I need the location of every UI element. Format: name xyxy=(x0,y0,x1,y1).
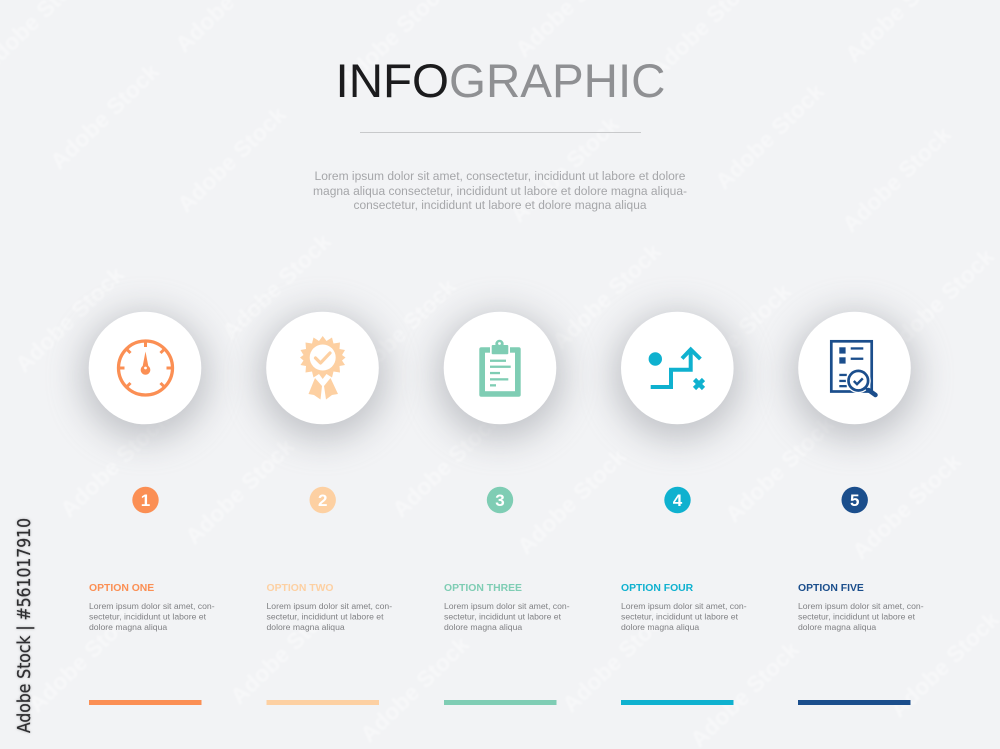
circle two xyxy=(266,312,379,424)
intro text block: Lorem ipsum dolor sit amet, consectetur, incididunt ut labore et dolore xyxy=(314,169,686,183)
bar five xyxy=(798,700,910,705)
text: option three: Lorem ipsum dolor sit amet, con- xyxy=(444,601,570,611)
icon: gauge xyxy=(118,341,173,395)
text: option two: Lorem ipsum dolor sit amet, con- xyxy=(266,601,392,611)
number badge one xyxy=(132,487,159,513)
watermark pattern: Adobe Stock xyxy=(180,433,299,549)
text: option one: Lorem ipsum dolor sit amet, con- xyxy=(89,601,215,611)
circle shadow one xyxy=(81,312,209,440)
heading: option five: OPTION FIVE xyxy=(798,583,864,594)
panel: option three xyxy=(436,312,570,705)
watermark pattern: Adobe Stock xyxy=(720,411,839,527)
text: option four: sectetur, incididunt ut labore et xyxy=(621,612,739,622)
number badge five: 5 xyxy=(850,491,859,510)
text: option three: dolore magna aliqua xyxy=(444,622,522,632)
number badge three xyxy=(487,487,513,513)
watermark pattern: Adobe Stock xyxy=(55,406,174,522)
watermark pattern: Adobe Stock xyxy=(355,631,474,747)
number badge one: 1 xyxy=(141,491,150,510)
circle four xyxy=(621,312,734,424)
watermark pattern: Adobe Stock xyxy=(557,601,676,717)
text: option five: sectetur, incididunt ut labore et xyxy=(798,612,916,622)
text: option one: dolore magna aliqua xyxy=(89,622,167,632)
text: option four: Lorem ipsum dolor sit amet, con- xyxy=(621,601,747,611)
panel: option four xyxy=(613,312,747,705)
watermark pattern: Adobe Stock xyxy=(512,443,631,559)
watermark pattern: Adobe Stock xyxy=(342,273,461,389)
watermark pattern: Adobe Stock xyxy=(847,448,966,564)
number badge two xyxy=(310,487,336,513)
bar three xyxy=(444,700,556,705)
watermark pattern: Adobe Stock xyxy=(677,278,796,394)
watermark pattern: Adobe Stock xyxy=(225,593,344,709)
watermark pattern: Adobe Stock xyxy=(217,228,336,344)
text: option three: sectetur, incididunt ut labore et xyxy=(444,612,562,622)
watermark pattern: Adobe Stock xyxy=(23,601,142,717)
circle shadow three xyxy=(436,312,564,440)
watermark pattern: Adobe Stock xyxy=(172,101,291,217)
intro text block: magna aliqua consectetur, incididunt ut labore et dolore magna aliqua- xyxy=(313,184,687,198)
title: INFOGRAPHIC xyxy=(336,55,666,108)
circle one xyxy=(89,312,201,424)
text: option one xyxy=(89,601,215,632)
watermark pattern: Adobe Stock xyxy=(880,243,999,359)
number badge three: 3 xyxy=(495,491,505,510)
watermark pattern: Adobe Stock xyxy=(837,121,956,237)
number badge four: 4 xyxy=(673,491,683,510)
circle shadow five xyxy=(790,312,918,440)
text: option two xyxy=(266,601,392,632)
text: option five: dolore magna aliqua xyxy=(798,622,876,632)
number badge four xyxy=(664,487,691,513)
circle shadow two xyxy=(258,312,386,440)
watermark pattern: Adobe Stock xyxy=(547,238,666,354)
watermark pattern: Adobe Stock xyxy=(10,261,129,377)
text: option five xyxy=(798,601,924,632)
text: option five: Lorem ipsum dolor sit amet, con- xyxy=(798,601,924,611)
text: option four: dolore magna aliqua xyxy=(621,622,699,632)
stock id label: Adobe Stock | #561017910 xyxy=(14,518,35,733)
circle three xyxy=(444,312,556,424)
heading: option one: OPTION ONE xyxy=(89,583,154,594)
watermark pattern: Adobe Stock xyxy=(685,636,804,749)
number badge two: 2 xyxy=(318,491,327,510)
intro text block: consectetur, incididunt ut labore et dolore magna aliqua xyxy=(354,198,647,212)
bar one xyxy=(89,700,202,705)
watermark pattern: Adobe Stock xyxy=(505,111,624,227)
heading: option two: OPTION TWO xyxy=(266,583,333,594)
icon: award ribbon xyxy=(300,336,346,400)
circle shadow four xyxy=(613,312,741,440)
text: option three xyxy=(444,601,570,632)
title divider xyxy=(360,132,641,133)
icon: clipboard xyxy=(479,340,521,397)
text: option two: dolore magna aliqua xyxy=(266,622,345,632)
number badge five xyxy=(842,487,868,513)
intro text block xyxy=(313,169,687,212)
text: option two: sectetur, incididunt ut labore et xyxy=(266,612,384,622)
icon: document search xyxy=(831,341,876,395)
text: option four xyxy=(621,601,747,632)
watermark pattern: Adobe Stock xyxy=(387,406,506,522)
panel: option two xyxy=(258,312,392,705)
heading: option three: OPTION THREE xyxy=(444,583,522,594)
text: option one: sectetur, incididunt ut labore et xyxy=(89,612,207,622)
icon: steps strategy xyxy=(649,350,704,388)
panel: option one xyxy=(81,312,215,705)
bar four xyxy=(621,700,734,705)
watermark pattern: Adobe Stock xyxy=(45,58,164,174)
bar two xyxy=(266,700,379,705)
circle five xyxy=(798,312,911,424)
watermark pattern: Adobe Stock xyxy=(710,78,829,194)
panel: option five xyxy=(790,312,924,705)
heading: option four: OPTION FOUR xyxy=(621,583,694,594)
